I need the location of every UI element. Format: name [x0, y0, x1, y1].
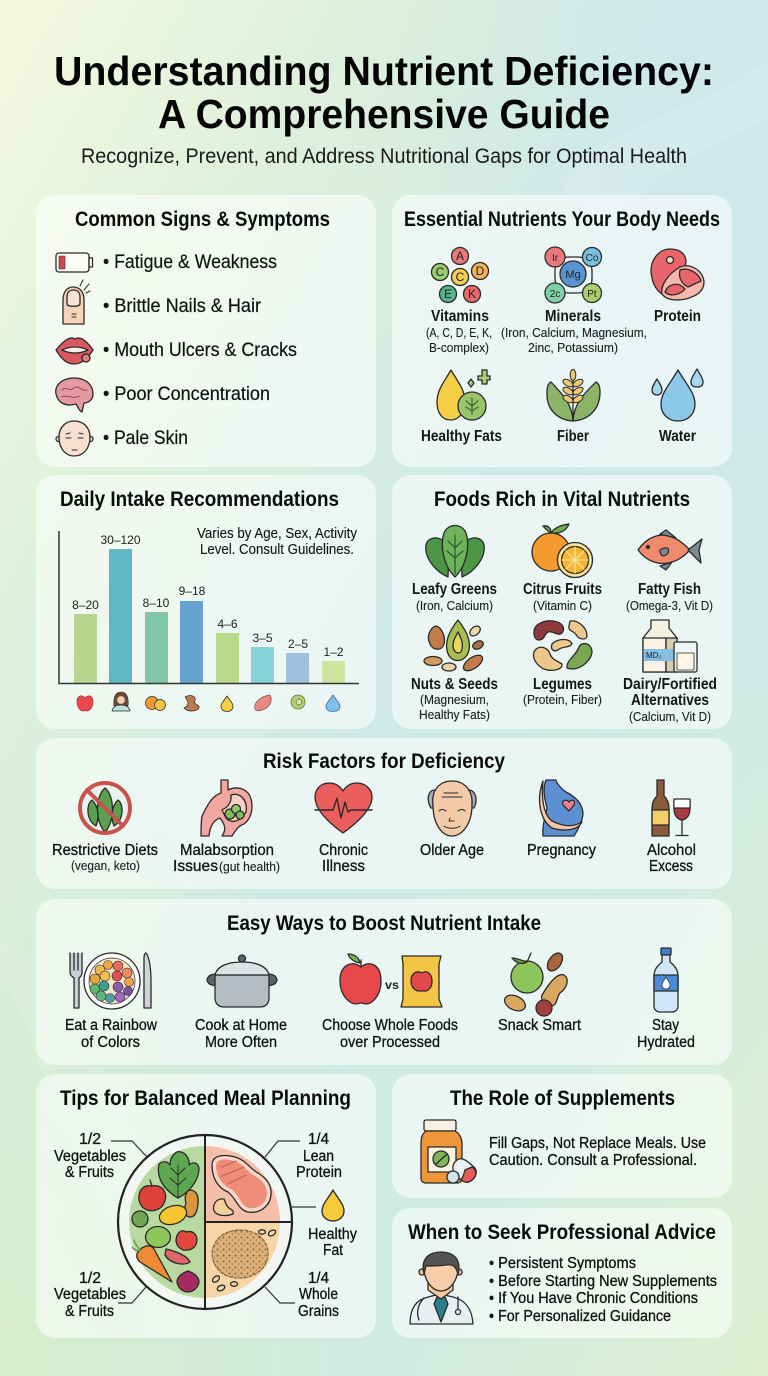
- plate diagram: [118, 1135, 292, 1309]
- icon: citrus: [532, 524, 592, 578]
- label: malabsorption: Issues: [173, 858, 218, 875]
- vitamin letters: C: [456, 270, 465, 284]
- icon: mouth ulcers: [56, 338, 93, 364]
- bar chart: 1–2: [323, 645, 344, 659]
- label: nuts and seeds: [411, 676, 498, 722]
- title: Understanding Nutrient Deficiency:: [54, 48, 714, 94]
- heading: foods: Foods Rich in Vital Nutrients: [434, 488, 690, 511]
- plate: whole grains: [211, 1229, 277, 1292]
- symptom: concentration: • Poor Concentration: [103, 383, 270, 405]
- mineral letters: [550, 253, 599, 300]
- heading: risk factors: Risk Factors for Deficiency: [263, 750, 505, 773]
- label: minerals: (Iron, Calcium, Magnesium,: [501, 325, 647, 340]
- label: legumes: Legumes: [533, 676, 592, 693]
- label: healthy fat: Fat: [323, 1242, 344, 1259]
- label: fatty fish: [626, 581, 713, 613]
- label: vegetables bottom: Vegetables: [54, 1286, 126, 1303]
- label: water: Water: [659, 428, 696, 445]
- icon: minerals: [545, 247, 602, 303]
- label: vegetables bottom: 1/2: [79, 1270, 101, 1287]
- panel: essential nutrients: [392, 195, 732, 467]
- note: guideline caveat: Level. Consult Guidelines.: [200, 542, 354, 558]
- symptom: nails: • Brittle Nails & Hair: [103, 295, 261, 317]
- label: vegetables top: [54, 1131, 126, 1181]
- label: chronic illness: Illness: [322, 858, 365, 875]
- mineral letters: Pt: [587, 289, 597, 300]
- label: whole foods: over Processed: [340, 1034, 440, 1051]
- label: chronic illness: Chronic: [319, 842, 368, 859]
- mineral letters: Mg: [565, 269, 581, 281]
- label: restrictive diets: (vegan, keto): [71, 858, 140, 873]
- subtitle: Recognize, Prevent, and Address Nutritional Gaps for Optimal Health: [81, 145, 687, 168]
- supplements text: Caution. Consult a Professional.: [489, 1152, 697, 1169]
- icon: healthy fats: [437, 370, 490, 420]
- label: whole grains: 1/4: [308, 1270, 329, 1287]
- label: cook at home: More Often: [205, 1034, 277, 1051]
- heading: boost intake: Easy Ways to Boost Nutrient Intake: [227, 912, 541, 935]
- label: stay hydrated: [637, 1017, 695, 1051]
- label: vitamins: B-complex): [429, 340, 489, 355]
- bullet list: [489, 1255, 717, 1325]
- label: eat a rainbow: [65, 1017, 158, 1051]
- note: guideline caveat: Varies by Age, Sex, Activity: [197, 526, 358, 542]
- label: snack smart: Snack Smart: [498, 1017, 582, 1034]
- label: cook at home: [195, 1017, 287, 1051]
- label: minerals: 2inc, Potassium): [528, 340, 618, 355]
- icon: snacks: [502, 950, 567, 1016]
- label: eat a rainbow: Eat a Rainbow: [65, 1017, 158, 1034]
- bar chart: 2–5: [288, 637, 308, 651]
- icon: stomach: [201, 780, 252, 836]
- label: eat a rainbow: of Colors: [81, 1034, 140, 1051]
- label: protein: Protein: [654, 308, 701, 325]
- icon: supplement bottle and capsule: [421, 1120, 476, 1183]
- label: legumes: [523, 676, 602, 707]
- label: legumes: (Protein, Fiber): [523, 692, 602, 707]
- note: guideline caveat: [197, 526, 358, 558]
- label: healthy fats: Healthy Fats: [421, 428, 502, 445]
- icon: vitamins: [432, 248, 488, 302]
- supplements text: Fill Gaps, Not Replace Meals. Use: [489, 1135, 706, 1152]
- label: lean protein: 1/4: [308, 1131, 329, 1148]
- vitamin letters: D: [476, 264, 485, 278]
- label: nuts and seeds: (Magnesium,: [420, 692, 489, 707]
- label: healthy fat: [308, 1226, 357, 1259]
- icon: pale face: [56, 421, 93, 456]
- label: older age: Older Age: [420, 842, 484, 859]
- label: dairy: [623, 676, 717, 724]
- icon: brittle nail: [63, 280, 90, 324]
- mineral letters: 2c: [550, 289, 560, 300]
- icon: water drops: [652, 369, 703, 421]
- icon: leafy greens: [426, 526, 484, 577]
- heading: nutrients: Essential Nutrients Your Body Needs: [404, 208, 720, 231]
- label: healthy fat: Healthy: [308, 1226, 357, 1243]
- label: fiber: Fiber: [557, 428, 589, 445]
- label: leafy greens: (Iron, Calcium): [416, 598, 493, 613]
- icon: fatty fish: [638, 530, 702, 570]
- label: vegetables top: Vegetables: [54, 1148, 126, 1165]
- label: lean protein: Protein: [296, 1164, 342, 1181]
- icon: nuts and seeds: [424, 620, 485, 674]
- bar chart: 3–5: [252, 631, 273, 645]
- label: alcohol excess: [647, 842, 696, 875]
- label: cook at home: Cook at Home: [195, 1017, 287, 1034]
- label: whole grains: [298, 1270, 339, 1320]
- icon: protein: [651, 249, 704, 300]
- icon: water bottle: [654, 948, 678, 1012]
- label: minerals: Minerals: [545, 308, 601, 325]
- label: citrus: [523, 581, 602, 613]
- panel: boost intake: [36, 899, 732, 1065]
- icon: heart with pulse: [315, 783, 372, 833]
- bar chart: 8–10: [143, 596, 170, 610]
- panel: professional advice: [392, 1208, 732, 1338]
- label: fatty fish: Fatty Fish: [638, 581, 701, 598]
- heading: supplements: The Role of Supplements: [450, 1087, 675, 1110]
- label: dairy: (Calcium, Vit D): [629, 709, 711, 724]
- label: restrictive diets: [52, 842, 158, 873]
- label: citrus: (Vitamin C): [533, 598, 592, 613]
- label: leafy greens: [412, 581, 497, 613]
- bar chart: [59, 531, 359, 684]
- label: whole grains: Whole: [299, 1286, 338, 1303]
- label: stay hydrated: Stay: [652, 1017, 679, 1034]
- label: vegetables top: & Fruits: [65, 1164, 114, 1181]
- label: vitamins: [426, 308, 492, 355]
- label: vitamins: (A, C, D, E, K,: [426, 325, 492, 340]
- icon: legumes: [533, 621, 592, 670]
- bullet list: • Before Starting New Supplements: [489, 1273, 717, 1290]
- icon: low battery: [56, 253, 92, 272]
- vitamin letters: [436, 249, 485, 301]
- callout lines: [111, 1141, 316, 1303]
- label: whole foods: [322, 1017, 458, 1051]
- label: dairy: Alternatives: [631, 692, 709, 709]
- label: restrictive diets: Restrictive Diets: [52, 842, 158, 859]
- bar chart: 9–18: [179, 584, 206, 598]
- label: lean protein: Lean: [303, 1148, 334, 1165]
- heading: meal planning: Tips for Balanced Meal Planning: [60, 1087, 351, 1110]
- icon: doctor: [410, 1252, 473, 1324]
- label: malabsorption: Malabsorption: [180, 842, 274, 859]
- symptom: mouth: • Mouth Ulcers & Cracks: [103, 339, 297, 361]
- label: lean protein: [296, 1131, 342, 1181]
- title: [54, 48, 714, 137]
- bullet list: • If You Have Chronic Conditions: [489, 1290, 698, 1307]
- label: malabsorption: [173, 842, 280, 875]
- icon: milk carton and glass: [643, 620, 697, 672]
- label: citrus: Citrus Fruits: [523, 581, 602, 598]
- mineral letters: Co: [586, 253, 599, 264]
- label: vitamins: Vitamins: [431, 308, 489, 325]
- panel: rich foods: [392, 475, 732, 729]
- label: whole grains: Grains: [298, 1303, 339, 1320]
- chart icons: [77, 692, 340, 712]
- icon: fiber: [547, 370, 600, 421]
- icon: wine bottle and glass: [652, 780, 690, 836]
- label: nuts and seeds: Nuts & Seeds: [411, 676, 498, 693]
- bar chart: 4–6: [217, 617, 238, 631]
- label: alcohol excess: Excess: [649, 858, 693, 875]
- bar chart: 8–20: [72, 598, 99, 612]
- label: alcohol excess: Alcohol: [647, 842, 696, 859]
- vitamin letters: C: [436, 265, 445, 279]
- heading: signs: Common Signs & Symptoms: [75, 208, 330, 231]
- label: minerals: [501, 308, 647, 355]
- icon: cooking pot: [207, 955, 277, 1007]
- panel: daily intake: [36, 475, 376, 729]
- label: vegetables bottom: & Fruits: [65, 1303, 114, 1320]
- bullet list: • Persistent Symptoms: [489, 1255, 636, 1272]
- panel: common signs and symptoms: [36, 195, 376, 467]
- supplements text: [489, 1135, 706, 1169]
- vitamin letters: E: [444, 287, 452, 301]
- label: pregnancy: Pregnancy: [527, 842, 596, 859]
- icon: older man: [428, 781, 476, 836]
- label: vegetables bottom: [54, 1270, 126, 1320]
- vitamin letters: A: [456, 249, 464, 263]
- carton text: MD₃: [646, 651, 662, 660]
- vs label: vs: [385, 978, 399, 992]
- vitamin letters: K: [468, 287, 476, 301]
- plate: lean protein: [212, 1156, 271, 1216]
- plate: vegetables and fruits: [132, 1152, 199, 1292]
- icon: brain: [56, 378, 93, 412]
- panel: role of supplements: [392, 1074, 732, 1198]
- panel: risk factors: [36, 738, 732, 889]
- heading: professional advice: When to Seek Professional Advice: [408, 1221, 716, 1244]
- mineral letters: Ir: [552, 253, 559, 264]
- icon: apple vs snack bag: [340, 954, 442, 1007]
- label: fatty fish: (Omega-3, Vit D): [626, 598, 713, 613]
- symptom: fatigue: • Fatigue & Weakness: [103, 251, 277, 273]
- title: A Comprehensive Guide: [158, 91, 610, 137]
- label: leafy greens: Leafy Greens: [412, 581, 497, 598]
- label: chronic illness: [319, 842, 368, 875]
- label: malabsorption: (gut health): [219, 859, 280, 874]
- label: stay hydrated: Hydrated: [637, 1034, 695, 1051]
- icon: pregnancy: [540, 780, 583, 836]
- icon: restrictive diets: [80, 783, 130, 833]
- label: whole foods: Choose Whole Foods: [322, 1017, 458, 1034]
- label: dairy: Dairy/Fortified: [623, 676, 717, 693]
- label: vegetables top: 1/2: [79, 1131, 101, 1148]
- icon: healthy fat drop: [322, 1190, 344, 1221]
- icon: rainbow plate with cutlery: [70, 953, 151, 1009]
- bar chart: 30–120: [100, 533, 141, 547]
- label: nuts and seeds: Healthy Fats): [419, 707, 490, 722]
- heading: daily intake: Daily Intake Recommendations: [60, 488, 339, 511]
- panel: balanced meal planning: [36, 1074, 376, 1338]
- bullet list: • For Personalized Guidance: [489, 1308, 671, 1325]
- symptom: pale skin: • Pale Skin: [103, 427, 188, 449]
